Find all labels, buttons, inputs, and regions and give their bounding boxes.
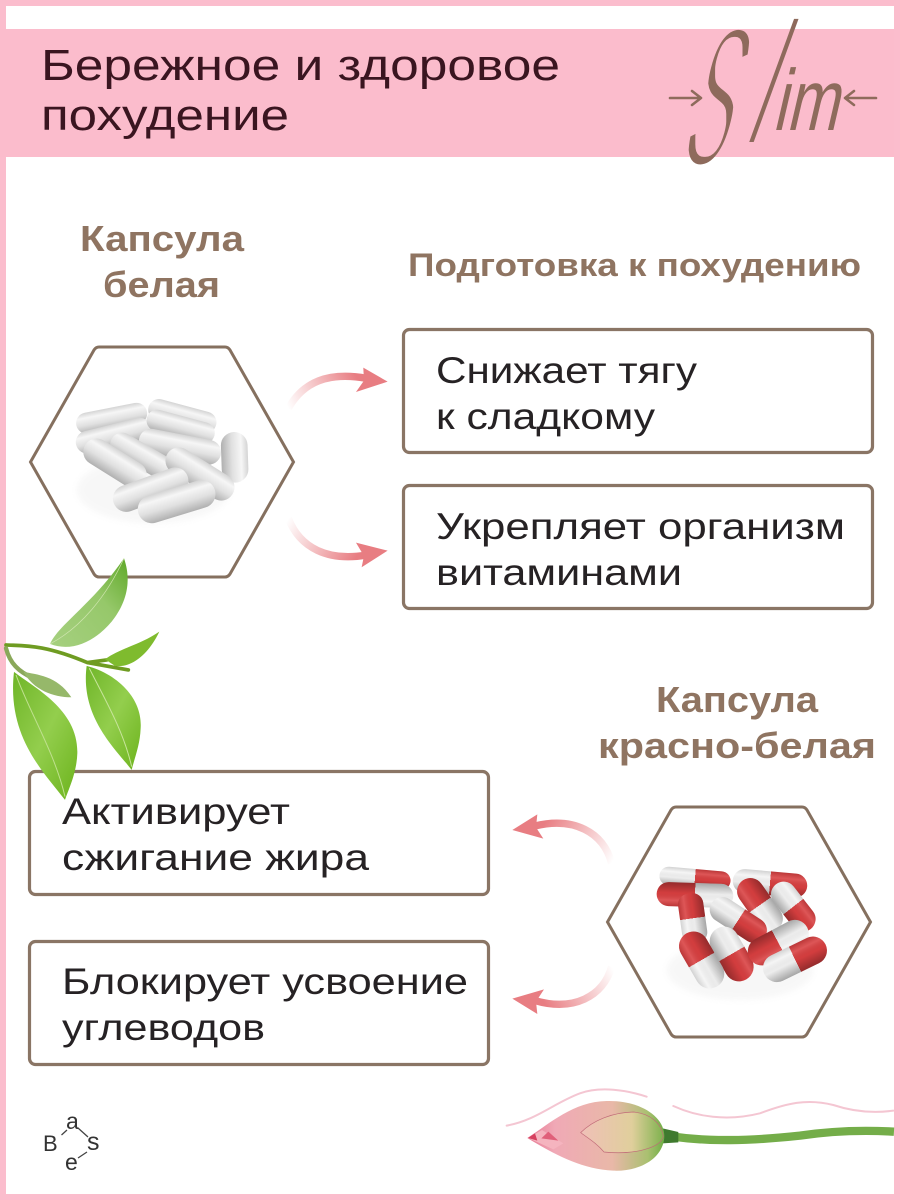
bud tip — [528, 1130, 563, 1149]
stem — [6, 645, 128, 670]
box: carbohydrates: углеводов — [62, 1007, 265, 1048]
heading: white capsule: белая — [103, 264, 220, 305]
title: Бережное и здоровое — [41, 41, 560, 90]
arrows from white capsule — [288, 368, 388, 567]
brand logo: Base: a — [66, 1108, 79, 1134]
leaf: right small — [105, 632, 159, 666]
header band — [0, 29, 894, 157]
box: sugar cravings: к сладкому — [436, 396, 656, 437]
heading: red-white capsule — [598, 679, 876, 766]
wavy lines — [507, 1089, 893, 1126]
box: fat burning: Активирует — [62, 791, 290, 832]
stem — [663, 1131, 894, 1140]
brand logo: Base: B — [43, 1131, 58, 1156]
bud body — [527, 1101, 664, 1171]
logo: Slim with arrows: im — [768, 53, 855, 149]
lotus bud — [507, 1089, 894, 1171]
box: carbohydrates: Блокирует усвоение — [62, 961, 468, 1002]
heading: white capsule: Капсула — [80, 218, 245, 259]
white capsules image — [73, 397, 249, 527]
box: fat burning: сжигание жира — [62, 837, 369, 878]
box: sugar cravings: Снижает тягу — [436, 350, 698, 391]
arrows from red-white capsule — [512, 814, 612, 1014]
leaf: small folded — [23, 672, 71, 697]
logo: Slim with arrows — [667, 0, 876, 209]
arrow: top — [288, 368, 388, 408]
arrow: upper — [512, 814, 612, 863]
heading: red-white capsule: Капсула — [656, 679, 819, 720]
hexagon: red-white capsules — [608, 807, 870, 1037]
title — [41, 41, 560, 140]
leaf: lower left — [13, 672, 77, 800]
heading: preparation: Подготовка к похудению — [408, 247, 861, 283]
red-white capsules image — [656, 866, 832, 1000]
title: похудение — [41, 91, 289, 140]
inner petal — [581, 1112, 663, 1153]
brand logo: Base — [43, 1108, 100, 1175]
leaf: top — [50, 558, 128, 647]
box: fat burning — [30, 772, 488, 894]
box: vitamins: Укрепляет организм — [436, 506, 845, 547]
box: sugar cravings — [404, 330, 872, 452]
heading: red-white capsule: красно-белая — [598, 725, 876, 766]
heading: white capsule — [80, 218, 245, 305]
leaf: lower middle — [86, 666, 141, 770]
brand logo: Base: s — [87, 1128, 100, 1156]
green leaves — [6, 558, 159, 800]
arrow: bottom — [288, 518, 388, 567]
brand logo: Base: e — [65, 1149, 78, 1175]
hexagon: white capsules — [30, 347, 294, 577]
box: vitamins — [404, 486, 872, 608]
box: carbohydrates — [30, 942, 488, 1064]
box: vitamins: витаминами — [436, 552, 682, 593]
arrow: lower — [512, 967, 612, 1014]
